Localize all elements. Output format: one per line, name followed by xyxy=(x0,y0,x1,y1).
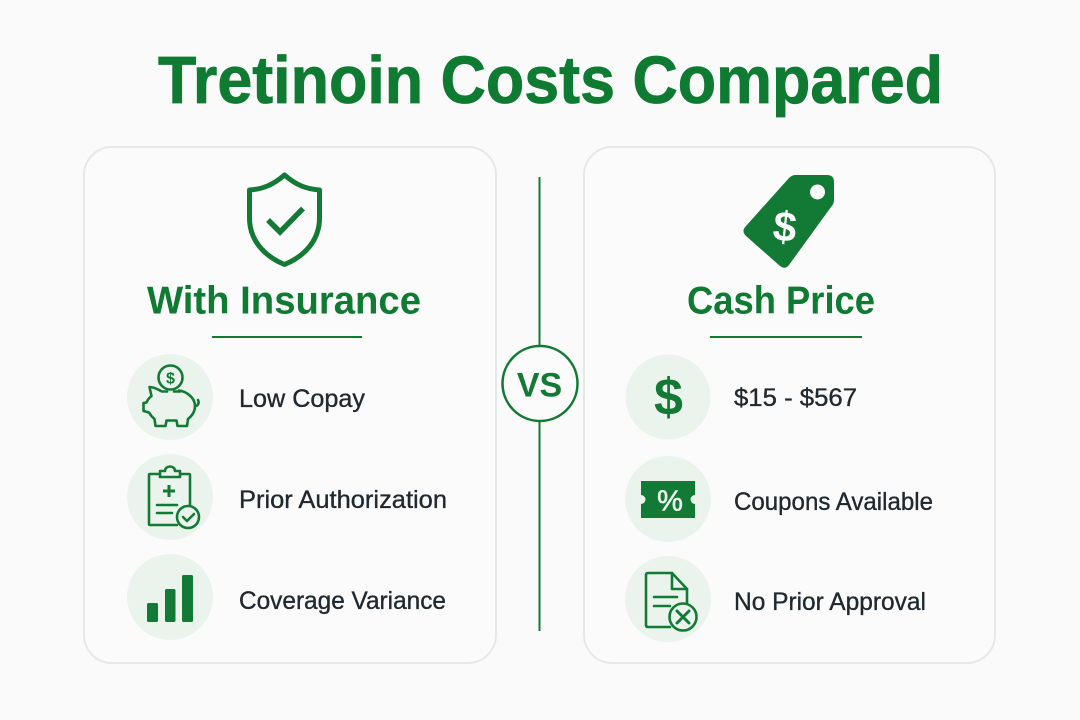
row: price range xyxy=(626,354,857,440)
icon: price tag: $ xyxy=(771,202,799,251)
heading underline xyxy=(212,336,362,338)
vertical divider xyxy=(538,177,540,631)
label: no prior approval: No Prior Approval xyxy=(734,588,926,616)
vs badge: VS xyxy=(517,366,562,404)
icon: clipboard with check xyxy=(127,454,213,540)
row: coverage variance xyxy=(127,554,446,640)
label: coverage variance: Coverage Variance xyxy=(239,587,446,615)
row: no prior approval xyxy=(625,556,926,642)
vs badge xyxy=(502,346,578,421)
panel: with insurance xyxy=(84,147,496,663)
label: prior authorization: Prior Authorization xyxy=(239,486,447,514)
row: low copay xyxy=(127,354,365,440)
heading: cash price: Cash Price xyxy=(687,280,875,322)
heading: with insurance: With Insurance xyxy=(147,280,421,322)
label: low copay: Low Copay xyxy=(239,385,365,413)
icon: price tag xyxy=(744,175,834,268)
icon: bar chart xyxy=(127,554,213,640)
label: coupons available: Coupons Available xyxy=(734,488,933,516)
icon: shield with check xyxy=(250,175,320,264)
icon: dollar sign: $ xyxy=(654,368,683,426)
row: coupons available xyxy=(625,456,933,542)
icon: dollar sign xyxy=(626,354,710,440)
icon: piggy bank: $ xyxy=(166,370,175,388)
label: price range: $15 - $567 xyxy=(734,384,857,412)
icon: piggy bank xyxy=(127,354,213,440)
icon: document with x xyxy=(625,556,711,642)
row: prior authorization xyxy=(127,454,447,540)
panel: cash price xyxy=(584,147,995,663)
title: Tretinoin Costs Compared xyxy=(158,43,943,118)
icon: coupon: % xyxy=(657,486,683,518)
heading underline xyxy=(710,336,862,338)
icon: coupon xyxy=(625,456,711,542)
